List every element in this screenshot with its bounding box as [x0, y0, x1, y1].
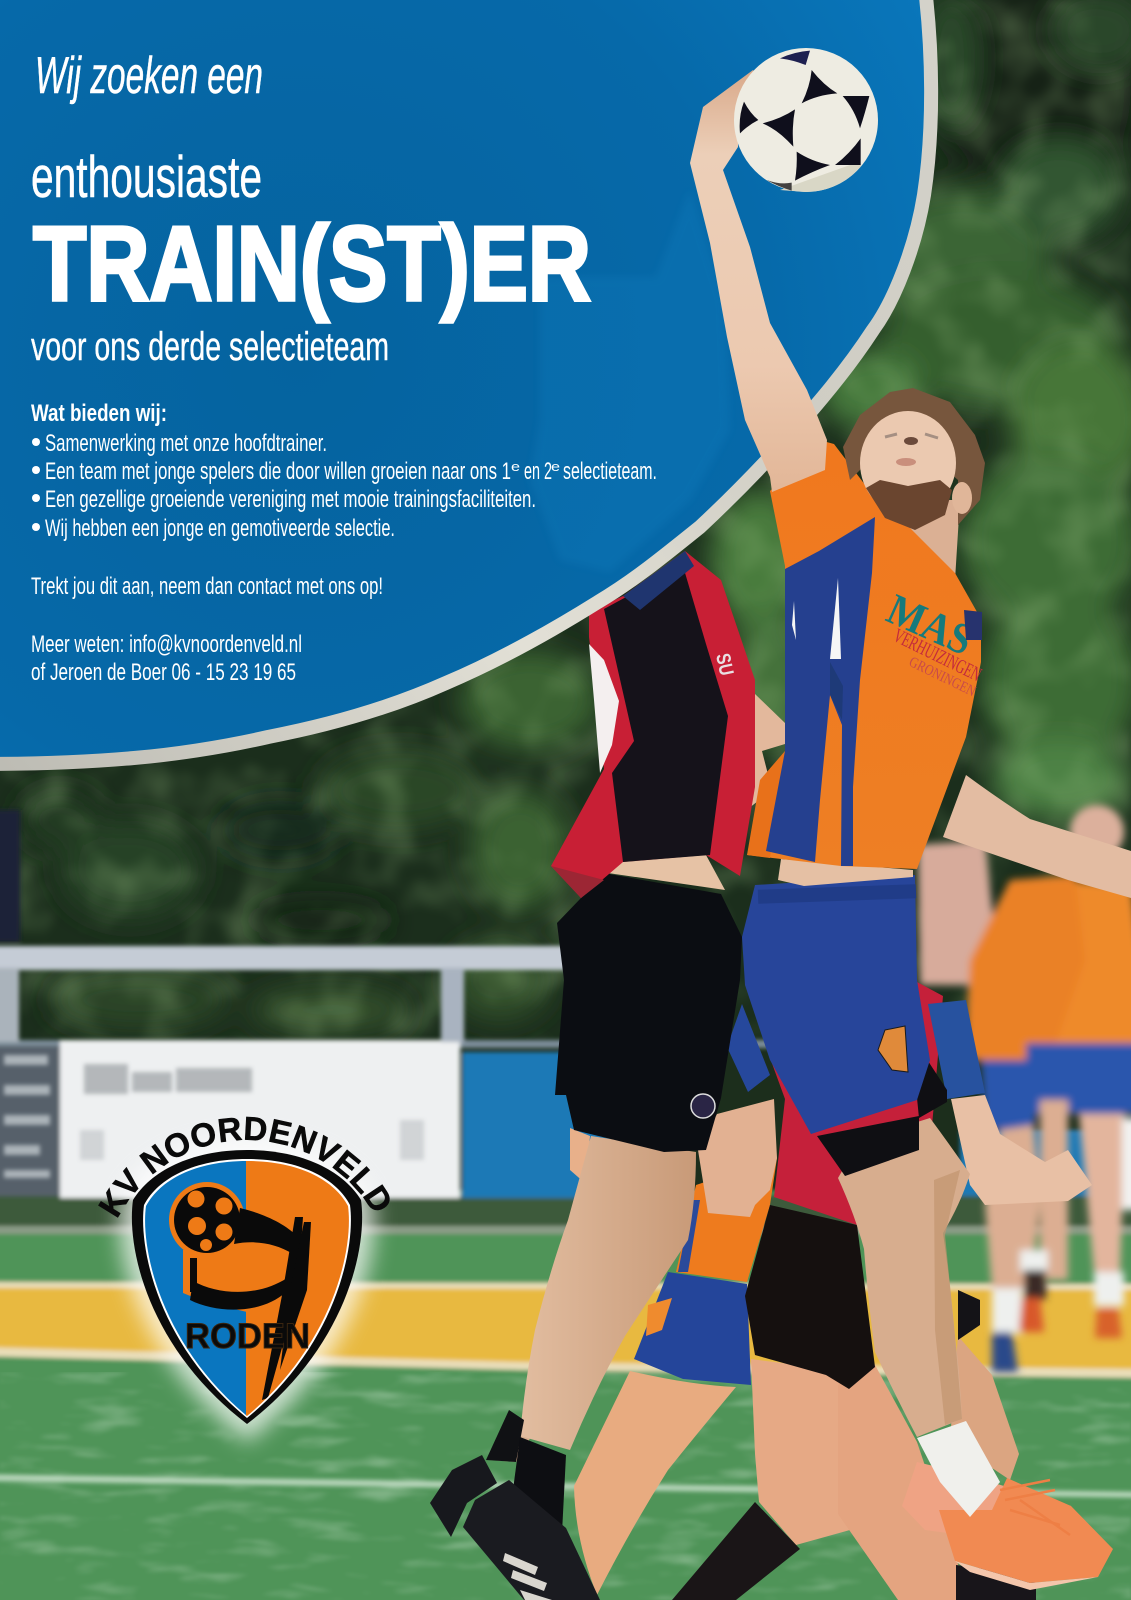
logo club name: KV NOORDENVELD	[98, 1116, 390, 1218]
sock	[917, 1421, 1000, 1517]
navy shorts	[742, 875, 930, 1134]
player: red and black shirt, jumping: SU	[711, 651, 737, 678]
leg	[838, 1118, 970, 1437]
text block: contact: Meer weten: info@kvnoordenveld.nl	[31, 631, 302, 658]
logo: KV Noordenveld Roden	[98, 1116, 390, 1452]
text block: contact	[31, 631, 302, 686]
player: red and black shirt, jumping	[430, 551, 785, 1600]
text block: wat bieden wij	[31, 400, 657, 542]
second shoe	[902, 1462, 1075, 1540]
text block: wat bieden wij: Een gezellige groeiende vereniging met mooie trainingsfaciliteiten.	[45, 486, 536, 513]
text block: call to action: Trekt jou dit aan, neem dan contact met ons op!	[31, 573, 383, 600]
text block: wat bieden wij: e	[551, 459, 560, 474]
logo town name: RODEN	[185, 1317, 310, 1356]
text block: wat bieden wij: Wij hebben een jonge en gemotiveerde selectie.	[45, 515, 395, 542]
blue arc panel with light border	[0, 0, 931, 764]
text block: wat bieden wij: Samenwerking met onze hoofdtrainer.	[45, 430, 327, 457]
text block: wat bieden wij: selectieteam.	[563, 458, 657, 485]
head	[843, 388, 985, 525]
player: orange shirt, reaching for ball: MAS	[880, 584, 980, 665]
player: woman in orange and navy	[570, 1099, 777, 1595]
field base	[0, 1190, 1131, 1600]
text block: wat bieden wij: e	[511, 459, 520, 474]
player: woman in red and black	[672, 982, 1092, 1600]
shirt	[747, 441, 981, 869]
heading: voor ons derde selectieteam: voor ons derde selectieteam	[31, 325, 389, 369]
player: orange shirt, reaching for ball: GRONINGEN	[906, 654, 978, 700]
player: orange shirt, reaching for ball	[690, 48, 1131, 1590]
text block: contact: of Jeroen de Boer 06 - 15 23 19 65	[31, 659, 296, 686]
neck	[875, 500, 960, 580]
basket emblem	[183, 1240, 247, 1312]
ball	[734, 48, 878, 192]
text block: wat bieden wij: Wat bieden wij:	[31, 400, 167, 427]
heading: trainster: TRAIN(ST)ER	[33, 205, 591, 323]
text block: wat bieden wij: en 2	[524, 458, 552, 485]
player: orange shirt, reaching for ball: VERHUIZINGEN	[890, 625, 985, 686]
arm	[690, 70, 827, 492]
far arm	[943, 775, 1131, 898]
ghost silhouette in panel	[530, 190, 730, 572]
heading: enthousiaste: enthousiaste	[31, 145, 262, 210]
blurred background players at right	[918, 805, 1131, 1372]
text block: wat bieden wij: Een team met jonge spelers die door willen groeien naar ons 1	[45, 458, 511, 485]
heading: wij zoeken een: Wij zoeken een	[35, 47, 263, 105]
compression shorts	[817, 1061, 947, 1176]
midriff	[778, 859, 913, 886]
shoe	[939, 1478, 1113, 1583]
